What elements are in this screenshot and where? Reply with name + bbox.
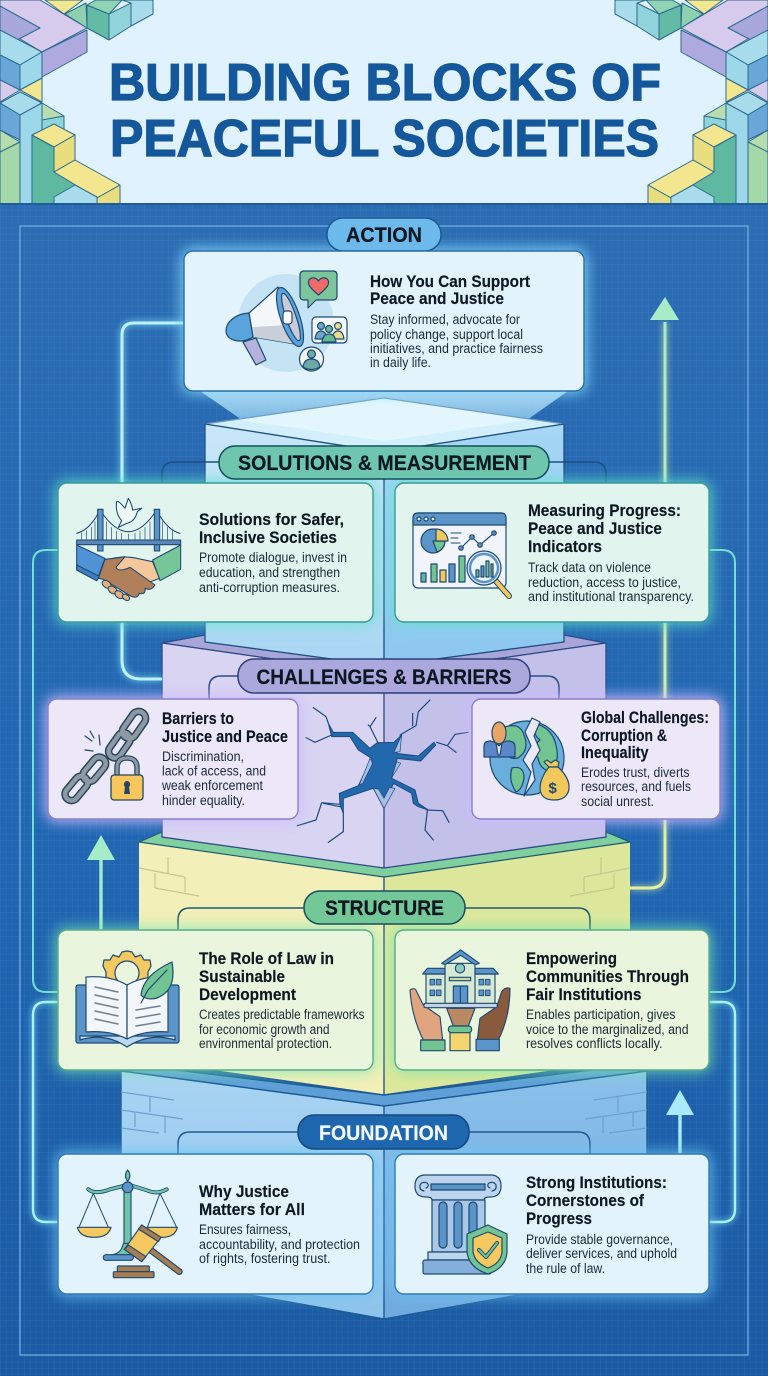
text: why justice matters: accountability, and protection (199, 1237, 360, 1252)
text: barriers to justice (161, 710, 288, 808)
text: role of law: The Role of Law in (199, 950, 334, 968)
text: strong institutions: Provide stable governance, (526, 1232, 673, 1247)
text: how you can support (370, 273, 543, 370)
pill: challenges and barriers (238, 659, 530, 693)
text: empowering communities: resolves conflicts locally. (526, 1036, 662, 1051)
icon: book, gear and leaf (76, 951, 179, 1047)
tier block: structure (139, 832, 630, 1095)
text: global challenges: social unrest. (581, 794, 654, 809)
text: role of law: for economic growth and (199, 1022, 330, 1037)
card: role of law (58, 930, 373, 1070)
icon: split globe, official and money bag: $ (548, 780, 558, 797)
pill: structure: STRUCTURE (325, 897, 444, 920)
text: strong institutions: Cornerstones of (526, 1192, 644, 1210)
card glows (45, 248, 723, 1297)
title: BUILDING BLOCKS OF (109, 54, 661, 112)
text: barriers to justice: hinder equality. (162, 793, 245, 808)
text: role of law: environmental protection. (199, 1036, 332, 1051)
icon: split globe, official and money bag (484, 718, 569, 800)
text: strong institutions: deliver services, and uphold (526, 1246, 677, 1261)
text: empowering communities: Fair Institutions (526, 986, 642, 1004)
text: measuring progress: and institutional transparency. (528, 589, 694, 604)
text: empowering communities: Communities Through (526, 968, 689, 986)
icon: bridge, dove and handshake (77, 498, 181, 602)
text: barriers to justice: Justice and Peace (162, 728, 288, 746)
text: why justice matters (199, 1183, 360, 1266)
text: why justice matters: Why Justice (199, 1183, 289, 1201)
text: solutions for safer societies: anti-corruption measures. (199, 580, 340, 595)
text: global challenges: resources, and fuels (581, 779, 691, 794)
card: global challenges (472, 699, 720, 819)
text: solutions for safer societies: Solutions for Safer, (199, 511, 344, 529)
card: barriers to justice (48, 699, 298, 819)
connector loop: left, structure to solutions (33, 550, 58, 992)
arrow: left up from structure (87, 835, 115, 935)
text: solutions for safer societies: education, and strengthen (199, 565, 340, 580)
text: how you can support: How You Can Support (370, 273, 530, 291)
text: global challenges: Inequality (581, 744, 649, 762)
pill: action: ACTION (346, 224, 422, 247)
bracket: foundation (178, 1132, 590, 1154)
text: how you can support: policy change, support local (370, 327, 523, 342)
bracket: structure (178, 908, 590, 930)
text: strong institutions: Strong Institutions: (526, 1174, 667, 1192)
text: role of law: Creates predictable frameworks (199, 1007, 365, 1022)
connector: action to challenges (122, 323, 184, 679)
text: role of law (199, 950, 365, 1051)
decorative isometric blocks, left (0, 0, 153, 204)
text: measuring progress: Peace and Justice (528, 520, 662, 538)
text: barriers to justice: lack of access, and (162, 764, 266, 778)
card: solutions for safer societies (58, 483, 373, 622)
text: barriers to justice: Discrimination, (162, 749, 244, 764)
text: solutions for safer societies: Inclusive Societies (199, 529, 337, 547)
icon: megaphone with social bubbles (226, 271, 347, 372)
text: why justice matters: of rights, fostering trust. (199, 1251, 330, 1266)
text: solutions for safer societies (199, 511, 347, 595)
text: strong institutions (526, 1174, 677, 1276)
text: how you can support: initiatives, and practice fairness (370, 341, 543, 356)
crack in the wall (297, 700, 468, 842)
icon: scales of justice and gavel (77, 1170, 179, 1278)
light beam under action card (200, 391, 568, 420)
text: barriers to justice: Barriers to (162, 710, 234, 728)
header background (0, 0, 768, 204)
tier block: foundation (121, 1060, 647, 1319)
text: global challenges (581, 709, 709, 809)
text: global challenges: Global Challenges: (581, 709, 709, 727)
pill: foundation (298, 1115, 469, 1149)
title: PEACEFUL SOCIETIES (110, 110, 659, 168)
pill: solutions and measurement (219, 446, 549, 479)
text: global challenges: Corruption & (581, 727, 667, 745)
text: empowering communities: voice to the marginalized, and (526, 1022, 688, 1037)
text: barriers to justice: weak enforcement (161, 778, 263, 793)
connector loop: left, foundation to structure (33, 1002, 58, 1222)
text: measuring progress: reduction, access to justice, (528, 575, 681, 590)
decorative isometric blocks, right (615, 0, 768, 204)
text: empowering communities: Enables participation, gives (526, 1007, 676, 1022)
arrow: structure up to action (630, 297, 679, 888)
card: how you can support (184, 251, 584, 391)
icon: hands lifting a building (410, 950, 510, 1051)
text: how you can support: in daily life. (370, 355, 431, 370)
card: measuring progress (395, 483, 709, 622)
title (109, 54, 661, 168)
tier block: challenges (162, 635, 606, 868)
text: how you can support: Peace and Justice (370, 290, 504, 308)
connector loop: right, structure to solutions (709, 550, 735, 992)
pill: challenges and barriers: CHALLENGES & BARRIERS (256, 666, 512, 689)
icon: analytics dashboard with magnifier (413, 513, 509, 596)
pill: solutions and measurement: SOLUTIONS & MEASUREMENT (238, 452, 531, 475)
card: why justice matters (58, 1154, 373, 1294)
text: measuring progress: Indicators (528, 538, 602, 556)
text: measuring progress (528, 502, 694, 604)
text: empowering communities: Empowering (526, 950, 617, 968)
text: global challenges: Erodes trust, diverts (581, 765, 690, 780)
text: empowering communities (526, 950, 689, 1051)
pill: foundation: FOUNDATION (319, 1122, 448, 1145)
text: measuring progress: Track data on violence (528, 560, 651, 575)
text: measuring progress: Measuring Progress: (528, 502, 681, 520)
text: role of law: Sustainable (199, 968, 285, 986)
card: empowering communities (395, 930, 709, 1070)
connector loop: right, foundation to structure (709, 1002, 735, 1222)
text: solutions for safer societies: Promote dialogue, invest in (199, 550, 347, 565)
arrow: right up from foundation (666, 1090, 694, 1158)
pill: action (327, 218, 441, 251)
text: why justice matters: Ensures fairness, (199, 1222, 291, 1237)
card: strong institutions (395, 1154, 709, 1294)
bracket: solutions (162, 462, 606, 483)
text: role of law: Development (199, 986, 296, 1004)
pill: structure (304, 891, 465, 924)
text: strong institutions: Progress (526, 1210, 592, 1228)
tier block: solutions (205, 398, 564, 666)
icon: broken chain and padlock (62, 709, 148, 803)
text: why justice matters: Matters for All (199, 1201, 305, 1219)
icon: column and shield (415, 1175, 507, 1274)
text: strong institutions: the rule of law. (526, 1261, 605, 1276)
text: how you can support: Stay informed, advocate for (370, 312, 520, 327)
bracket: challenges (209, 676, 559, 699)
